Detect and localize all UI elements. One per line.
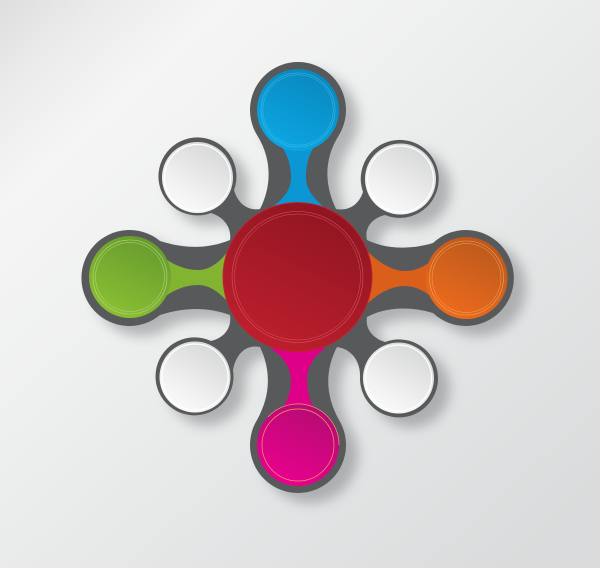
white node: bottom left (160, 342, 230, 412)
drop shadow (93, 72, 526, 503)
dark connector silhouette (81, 62, 514, 493)
white node: top left (162, 142, 233, 213)
blue node with neck (257, 69, 339, 207)
white node: top right (365, 144, 436, 214)
orange node with neck (366, 237, 508, 319)
white node: bottom right (363, 342, 434, 414)
magenta node with neck (257, 348, 339, 486)
red central hub (223, 202, 372, 352)
green node with neck (89, 236, 229, 318)
